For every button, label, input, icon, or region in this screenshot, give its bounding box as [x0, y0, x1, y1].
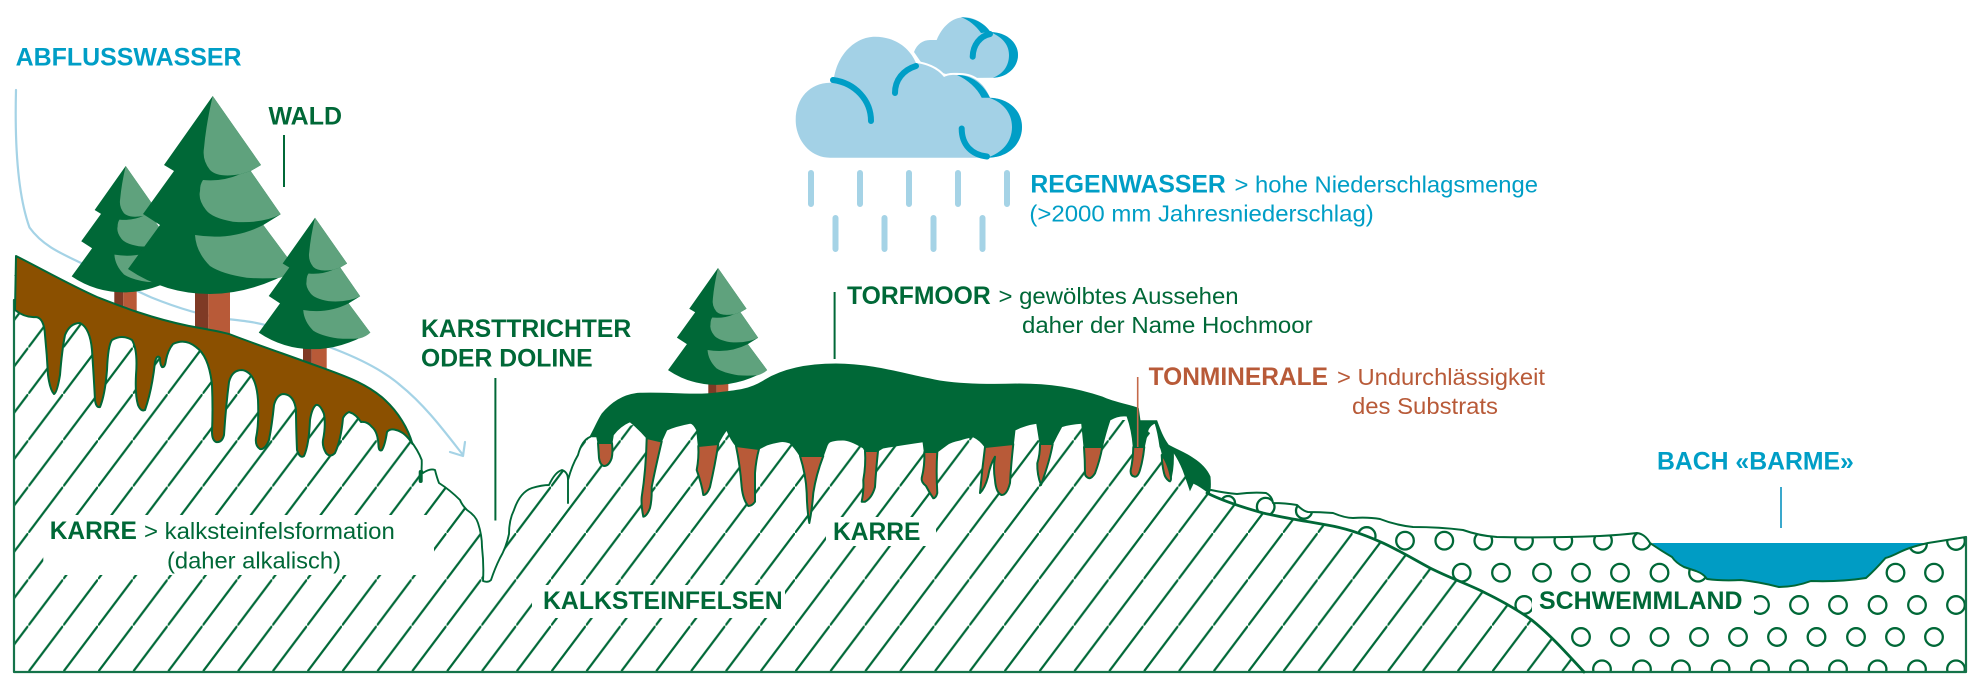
label: Karsttrichter oder Doline with leader	[421, 316, 632, 520]
label: Bach Barme with leader: BACH «BARME»	[1657, 448, 1854, 475]
peat bog with clay mineral drips	[590, 364, 1210, 523]
label: Karre Kalksteinfelsformation	[50, 518, 395, 574]
label: Regenwasser	[1029, 172, 1538, 227]
tree: large	[128, 96, 296, 340]
label: Wald with leader: WALD	[268, 104, 342, 131]
terrain outlines	[14, 300, 1966, 672]
label: Karre: KARRE	[833, 519, 920, 546]
front cloud	[796, 37, 1022, 158]
label: Wald with leader	[268, 104, 342, 187]
label: Torfmoor with leader: daher der Name Hochmoor	[1022, 312, 1313, 338]
label: Torfmoor with leader	[835, 283, 1313, 359]
label: Kalksteinfelsen: KALKSTEINFELSEN	[543, 588, 783, 615]
label: Karsttrichter oder Doline with leader: ODER DOLINE	[421, 346, 593, 373]
label: Karre Kalksteinfelsformation: (daher alkalisch)	[167, 548, 341, 574]
label: Torfmoor with leader: TORFMOOR	[847, 283, 991, 310]
label: Tonminerale with leader	[1138, 364, 1546, 447]
tree: left	[72, 166, 179, 325]
brook water	[1652, 543, 1928, 587]
label: Regenwasser: REGENWASSER	[1030, 172, 1226, 199]
tree: right	[259, 218, 370, 370]
rain cloud icon	[796, 17, 1022, 249]
rain drops	[811, 173, 1007, 249]
label: Abflusswasser: ABFLUSSWASSER	[16, 45, 242, 72]
back cloud	[914, 17, 1018, 78]
label: Tonminerale with leader: TONMINERALE	[1149, 364, 1328, 391]
label: Tonminerale with leader: des Substrats	[1352, 393, 1498, 419]
label: Karre Kalksteinfelsformation: > kalksteinfelsformation	[144, 518, 395, 544]
soil layer with limestone pavement drips	[15, 256, 412, 457]
runoff water arrow	[16, 90, 465, 456]
label: Tonminerale with leader: > Undurchlässigkeit	[1337, 364, 1546, 390]
label: Karsttrichter oder Doline with leader: KARSTTRICHTER	[421, 316, 632, 343]
forest trees on slope	[72, 96, 370, 370]
label: Regenwasser: > hohe Niederschlagsmenge	[1234, 172, 1538, 198]
label: Schwemmland: SCHWEMMLAND	[1539, 588, 1742, 615]
limestone bedrock hatched	[14, 275, 1584, 672]
alluvial land circle pattern	[1221, 496, 1965, 678]
label: Regenwasser: (>2000 mm Jahresniederschlag)	[1029, 201, 1374, 227]
clay drips	[598, 438, 1171, 523]
tree on peat bog	[668, 268, 767, 400]
label: Torfmoor with leader: > gewölbtes Aussehen	[998, 283, 1239, 309]
peat body	[590, 364, 1210, 493]
label: Karre Kalksteinfelsformation: KARRE	[50, 518, 137, 545]
